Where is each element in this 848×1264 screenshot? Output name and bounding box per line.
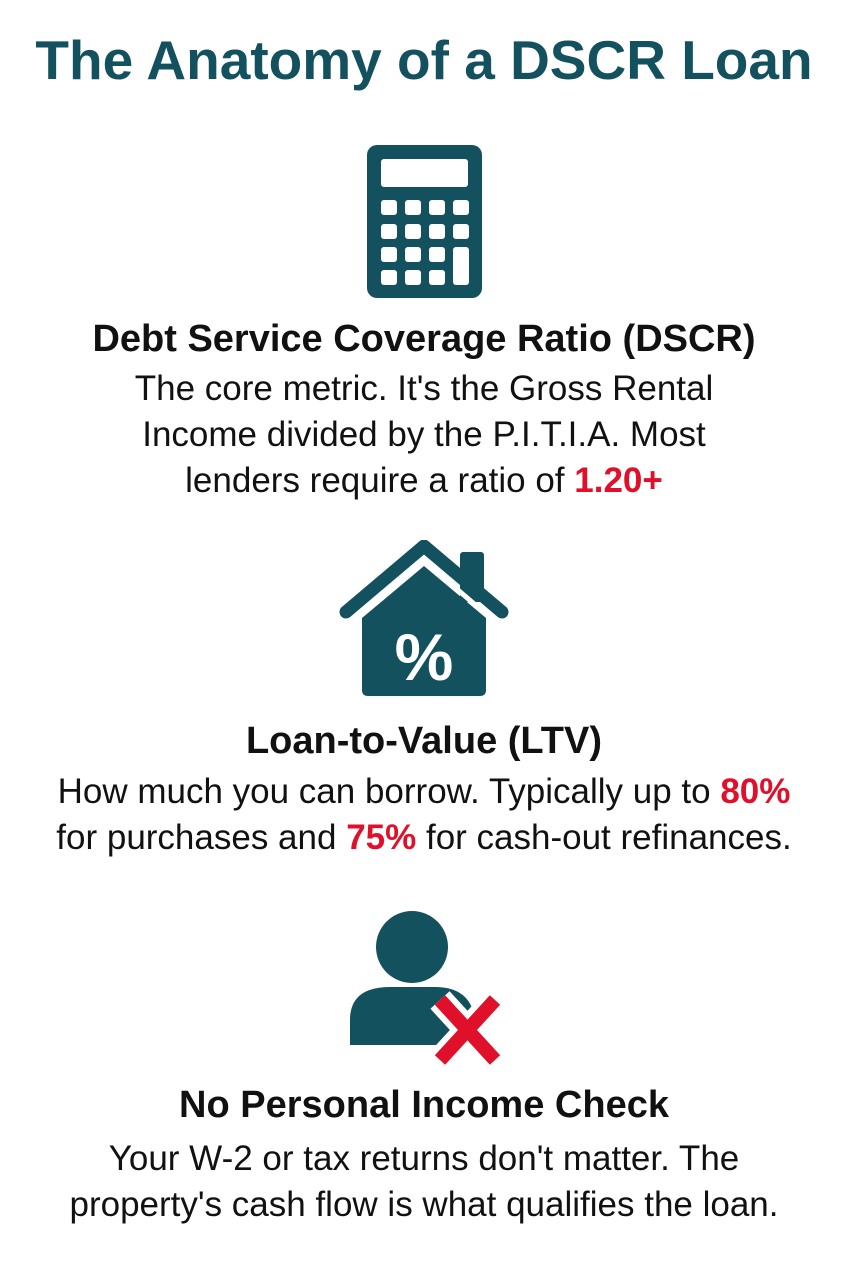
heading: DSCR: Debt Service Coverage Ratio (DSCR) (92, 318, 756, 360)
text: income description: Your W-2 or tax returns don't matter. The (109, 1139, 739, 1178)
text: DSCR description: The core metric. It's the Gross Rental (135, 369, 713, 408)
text: DSCR description (135, 369, 713, 500)
text: DSCR description: Income divided by the P.I.T.I.A. Most (142, 415, 706, 454)
icon: house with percent (340, 540, 508, 696)
icon: person with red x (350, 911, 500, 1065)
text: DSCR description: lenders require a ratio of 1.20+ (185, 461, 663, 500)
heading: no personal income: No Personal Income Check (179, 1084, 669, 1126)
heading: LTV: Loan-to-Value (LTV) (246, 720, 602, 762)
title: The Anatomy of a DSCR Loan (35, 29, 813, 91)
text: LTV description: How much you can borrow. Typically up to 80% (58, 772, 790, 811)
text: income description: property's cash flow is what qualifies the loan. (70, 1185, 778, 1224)
icon: house with percent: % (395, 620, 453, 694)
text: LTV description (56, 772, 792, 857)
text: income description (70, 1139, 778, 1224)
text: LTV description: for purchases and 75% for cash-out refinances. (56, 818, 792, 857)
icon: calculator (367, 145, 482, 298)
